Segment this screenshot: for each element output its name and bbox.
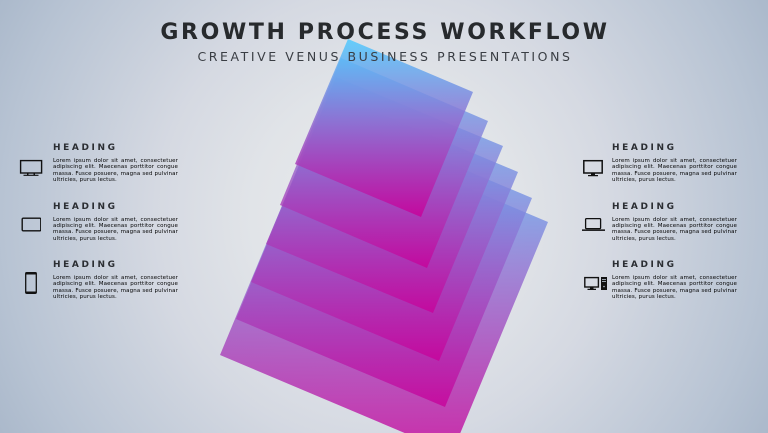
subtitle: CREATIVE VENUS BUSINESS PRESENTATIONS (197, 48, 572, 64)
text: right 1: Lorem ipsum dolor sit amet, consectetuer adipiscing elit. Maecenas porttitor congue massa. Fusce posuere, magna sed pulvinar ultricies, purus lectus. (612, 158, 737, 183)
icon: desktop tower (584, 276, 607, 290)
heading: left 3: HEADING (53, 260, 118, 270)
icon: phone (25, 272, 37, 294)
icon: monitor (20, 160, 42, 176)
text: left 1: Lorem ipsum dolor sit amet, consectetuer adipiscing elit. Maecenas porttitor congue massa. Fusce posuere, magna sed pulvinar ultricies, purus lectus. (53, 158, 178, 183)
heading: right 2: HEADING (612, 202, 677, 212)
heading: right 1: HEADING (612, 143, 677, 153)
title: GROWTH PROCESS WORKFLOW (160, 20, 610, 45)
text: left 2: Lorem ipsum dolor sit amet, consectetuer adipiscing elit. Maecenas porttitor congue massa. Fusce posuere, magna sed pulvinar ultricies, purus lectus. (53, 216, 178, 242)
icon: tablet (22, 218, 41, 232)
heading: left 1: HEADING (53, 143, 118, 153)
icon: laptop (582, 218, 605, 231)
text: left 3: Lorem ipsum dolor sit amet, consectetuer adipiscing elit. Maecenas porttitor congue massa. Fusce posuere, magna sed pulvinar ultricies, purus lectus. (53, 275, 178, 300)
text: right 2: Lorem ipsum dolor sit amet, consectetuer adipiscing elit. Maecenas porttitor congue massa. Fusce posuere, magna sed pulvinar ultricies, purus lectus. (612, 216, 737, 242)
icon: desktop display (583, 160, 603, 176)
heading: left 2: HEADING (53, 202, 118, 212)
text: right 3: Lorem ipsum dolor sit amet, consectetuer adipiscing elit. Maecenas porttitor congue massa. Fusce posuere, magna sed pulvinar ultricies, purus lectus. (612, 275, 737, 300)
heading: right 3: HEADING (612, 260, 677, 270)
